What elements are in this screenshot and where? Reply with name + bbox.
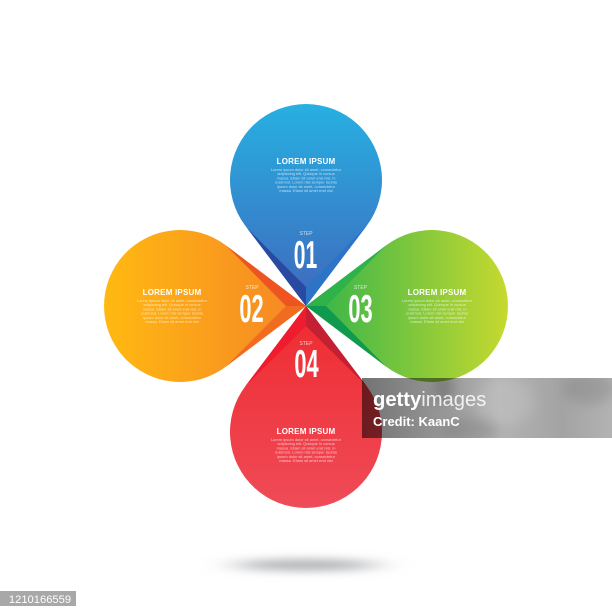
petal: step 03 green: [306, 230, 508, 382]
green teardrop body: [306, 230, 508, 382]
blue left facet: [247, 228, 306, 306]
orange body text: massa. Etiam sit amet erat nisi, in: [143, 306, 201, 311]
blue step label: STEP: [299, 231, 313, 237]
red body text: Lorem ipsum dolor sit amet, consectetur: [271, 437, 342, 442]
red body text: [271, 437, 342, 463]
orange heading: LOREM IPSUM: [143, 288, 201, 297]
orange body text: adipiscing elit. Quisque in cursus: [143, 302, 201, 307]
red step label: STEP: [299, 341, 313, 347]
orange lower facet: [226, 306, 306, 367]
blue step number: 01: [294, 233, 317, 277]
blue body text: Lorem ipsum dolor sit amet, consectetur: [271, 167, 342, 172]
image id tag: [0, 591, 76, 606]
blue heading: LOREM IPSUM: [277, 157, 335, 166]
orange step label: STEP: [245, 285, 259, 291]
red body text: massa. Etiam sit amet erat nisi: [279, 458, 333, 463]
orange teardrop body: [104, 230, 306, 382]
orange body text: euismod. Lorem nisl semper lacinia: [141, 311, 204, 316]
orange upper facet: [226, 245, 306, 306]
green lower facet: [306, 306, 386, 367]
green upper facet: [306, 245, 386, 306]
green body text: euismod. Lorem nisl semper lacinia: [406, 311, 469, 316]
red body text: massa. Etiam sit amet erat nisi, in: [277, 445, 335, 450]
red body text: adipiscing elit. Quisque in cursus: [277, 441, 335, 446]
petal: step 04 red: [230, 306, 382, 508]
watermark logo: gettyimages: [373, 389, 486, 411]
watermark credit: Credit: KaanC: [373, 414, 460, 429]
green body text: massa. Etiam sit amet erat nisi, in: [408, 306, 466, 311]
red body text: euismod. Lorem nisl semper lacinia: [275, 450, 338, 455]
petal: step 02 orange: [104, 230, 306, 382]
green body text: [402, 298, 473, 324]
green body text: adipiscing elit. Quisque in cursus: [408, 302, 466, 307]
green step number: 03: [348, 286, 373, 331]
red teardrop body: [230, 306, 382, 508]
green step label: STEP: [354, 285, 368, 291]
red heading: LOREM IPSUM: [277, 427, 335, 436]
blue body text: massa. Etiam sit amet erat nisi, in: [277, 175, 335, 180]
green body text: Lorem ipsum dolor sit amet, consectetur: [402, 298, 473, 303]
blue body text: [271, 167, 342, 193]
red body text: ipsum dolor sit amet, consectetur: [277, 454, 336, 459]
image id tag: 1210166559: [9, 594, 71, 606]
orange body text: [137, 298, 208, 324]
petal: step 01 blue: [230, 104, 382, 306]
blue body text: massa. Etiam sit amet erat nisi: [279, 188, 333, 193]
blue body text: euismod. Lorem nisl semper lacinia: [275, 180, 338, 185]
green body text: ipsum dolor sit amet, consectetur: [408, 315, 467, 320]
orange body text: massa. Etiam sit amet erat nisi: [145, 319, 199, 324]
blue right facet: [306, 226, 367, 306]
red left facet: [245, 306, 306, 386]
red step number: 04: [294, 341, 319, 386]
blue teardrop body: [230, 104, 382, 306]
orange step number: 02: [239, 286, 264, 331]
blue body text: adipiscing elit. Quisque in cursus: [277, 171, 335, 176]
green heading: LOREM IPSUM: [408, 288, 466, 297]
blue body text: ipsum dolor sit amet, consectetur: [277, 184, 336, 189]
green body text: massa. Etiam sit amet erat nisi: [410, 319, 464, 324]
orange body text: ipsum dolor sit amet, consectetur: [143, 315, 202, 320]
red right facet: [306, 306, 367, 386]
watermark banner: [362, 378, 612, 438]
orange body text: Lorem ipsum dolor sit amet, consectetur: [137, 298, 208, 303]
ground shadow: [234, 559, 378, 571]
